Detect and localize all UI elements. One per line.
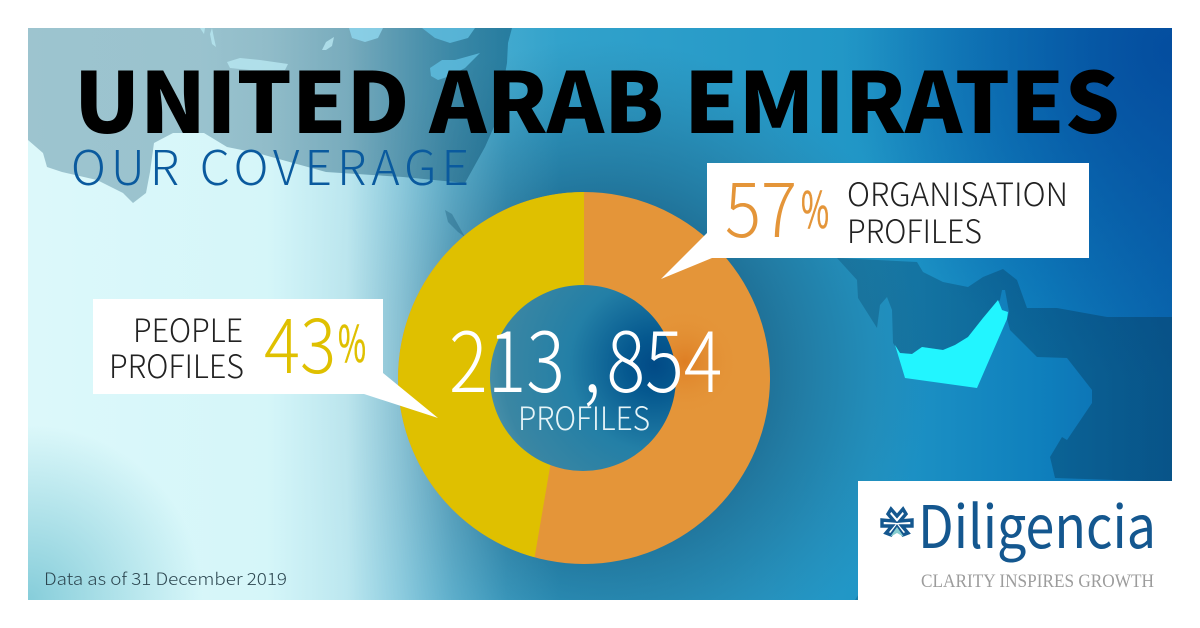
total count: PROFILES <box>518 394 650 440</box>
wordmark: Diligencia <box>918 480 1156 565</box>
title: UNITED ARAB EMIRATES <box>74 37 1120 158</box>
total count <box>449 297 722 440</box>
callout: organisation profiles: PROFILES <box>847 207 982 253</box>
land: red sea sliver <box>445 210 465 237</box>
icon: diligencia star <box>882 509 912 537</box>
callout: people profiles: PROFILES <box>109 342 244 388</box>
segment: people profiles 43% <box>398 192 584 557</box>
callout: organisation profiles: 57 <box>725 149 797 259</box>
callout: people profiles: PEOPLE <box>133 306 243 352</box>
donut chart <box>398 192 770 564</box>
total count: , <box>583 297 601 417</box>
subtitle: OUR COVERAGE <box>71 129 469 199</box>
callout: organisation profiles <box>661 149 1089 279</box>
callout: organisation profiles: ORGANISATION <box>847 170 1068 216</box>
callout: people profiles: % <box>338 305 366 377</box>
donut hole <box>490 285 676 471</box>
highlighted country: United Arab Emirates <box>895 300 1008 388</box>
land: north-west coast <box>28 28 512 203</box>
total count: 854 <box>606 297 722 417</box>
callout: people profiles: 43 <box>264 285 336 395</box>
logo panel <box>858 480 1172 600</box>
data date note: Data as of 31 December 2019 <box>44 565 287 590</box>
sea inlets and islands <box>200 28 480 80</box>
segment: organisation profiles 57% <box>398 192 770 564</box>
total count: 213 <box>449 297 565 417</box>
callout: people profiles <box>93 285 438 418</box>
land: gulf region <box>837 258 1172 482</box>
callout: organisation profiles: % <box>801 171 829 243</box>
tagline: CLARITY INSPIRES GROWTH <box>921 571 1154 592</box>
